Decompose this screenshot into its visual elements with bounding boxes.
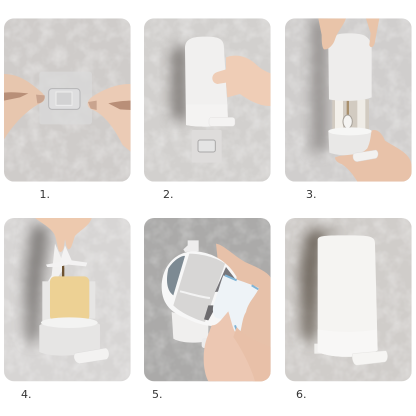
tissue <box>213 275 259 338</box>
left hand <box>4 74 45 139</box>
panel 1: peel adhesive sticker <box>4 18 131 182</box>
right hand <box>88 84 131 152</box>
hand on top right <box>366 18 379 47</box>
wall shadow <box>300 230 338 340</box>
open inner chamber <box>332 99 369 131</box>
lower body <box>172 312 208 343</box>
wall shadow <box>312 18 327 152</box>
hand on top left <box>318 18 346 49</box>
base <box>39 317 100 356</box>
adhesive sticker <box>192 130 222 163</box>
hand behind <box>216 244 271 381</box>
panel 2: attach soap holder <box>144 18 271 182</box>
top clip <box>183 240 199 252</box>
tab clip <box>202 341 206 348</box>
step number 3: 3. <box>306 188 316 201</box>
wall shadow <box>25 225 50 342</box>
adhesive sticker <box>39 72 92 124</box>
side walls <box>42 281 95 321</box>
cover lifted <box>328 33 372 101</box>
panel 4: place the soap <box>4 218 131 381</box>
step number 5: 5. <box>152 388 162 401</box>
push tab <box>74 348 109 364</box>
step number 1: 1. <box>40 188 50 201</box>
panel 3: open the holder <box>285 18 412 182</box>
step number 2: 2. <box>163 188 174 201</box>
push tab <box>353 150 378 162</box>
hand below <box>335 130 412 182</box>
fingers <box>35 218 92 252</box>
hand <box>212 56 271 106</box>
step number 6: 6. <box>296 388 306 401</box>
base <box>328 127 372 155</box>
wall shadow <box>172 47 187 120</box>
panel 5: wipe inside with tissue <box>144 218 271 381</box>
push tab <box>209 117 235 126</box>
holder body <box>314 235 378 357</box>
open holder <box>162 251 237 326</box>
step number 4: 4. <box>21 388 32 401</box>
panel 6: finished installation <box>285 218 412 381</box>
front hand <box>204 312 254 382</box>
front finger <box>233 327 271 381</box>
push plate and rod <box>46 244 87 284</box>
push tab <box>352 351 388 365</box>
holder body <box>185 37 228 127</box>
soap bar <box>50 276 89 321</box>
